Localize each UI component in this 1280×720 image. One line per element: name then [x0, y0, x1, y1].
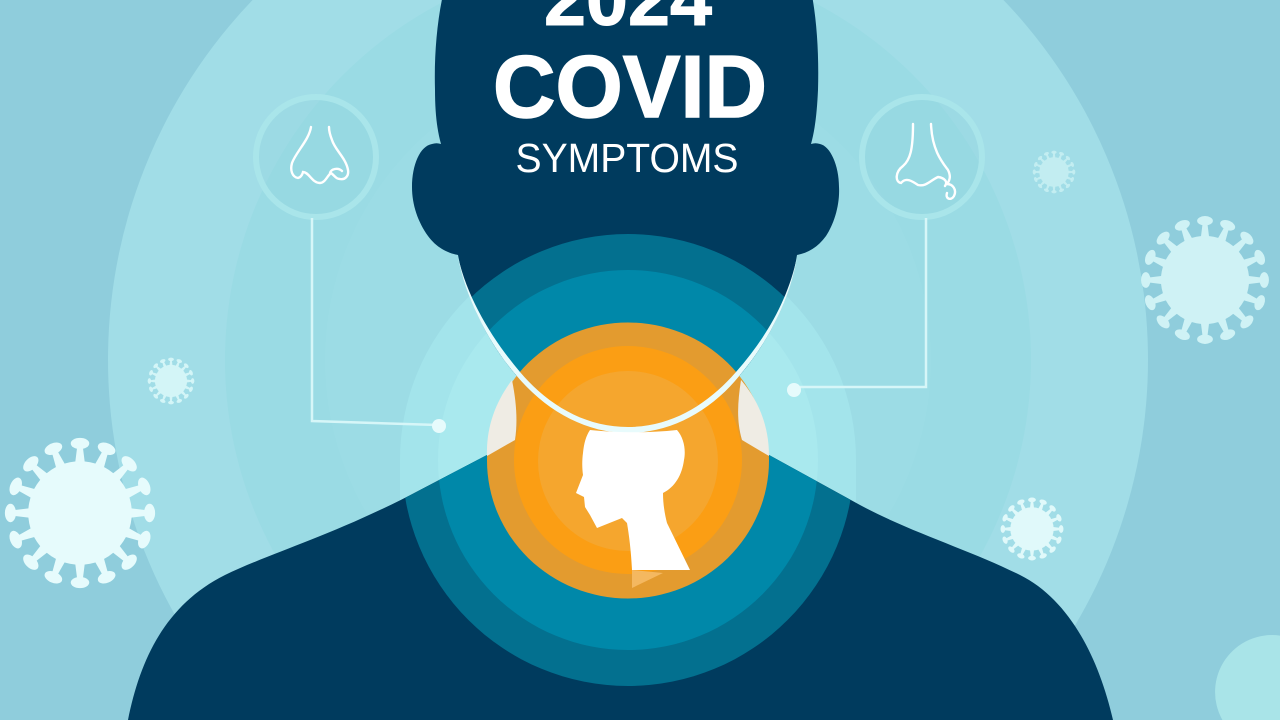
teal rings clipped to silhouette: [402, 234, 854, 686]
callout: right nose icon: [787, 97, 982, 397]
neck side patch right: [738, 380, 769, 456]
orange neck circle: [487, 322, 769, 598]
icon: white head profile: [576, 430, 690, 588]
icon: small virus top right: [1033, 151, 1075, 193]
title: [493, 0, 767, 181]
icon: small virus left: [148, 358, 194, 404]
title: SYMPTOMS: [516, 135, 738, 181]
neck side patch left: [487, 380, 516, 456]
chin line: [458, 257, 797, 433]
silhouette: head and shoulders: [128, 0, 1113, 720]
title: COVID: [493, 37, 767, 136]
icon: medium virus right: [1001, 498, 1063, 560]
bottom-right blob: [1215, 635, 1280, 720]
icon: large virus left: [5, 438, 155, 588]
callout: left nose icon: [256, 97, 446, 433]
icon: large virus right: [1141, 216, 1269, 344]
